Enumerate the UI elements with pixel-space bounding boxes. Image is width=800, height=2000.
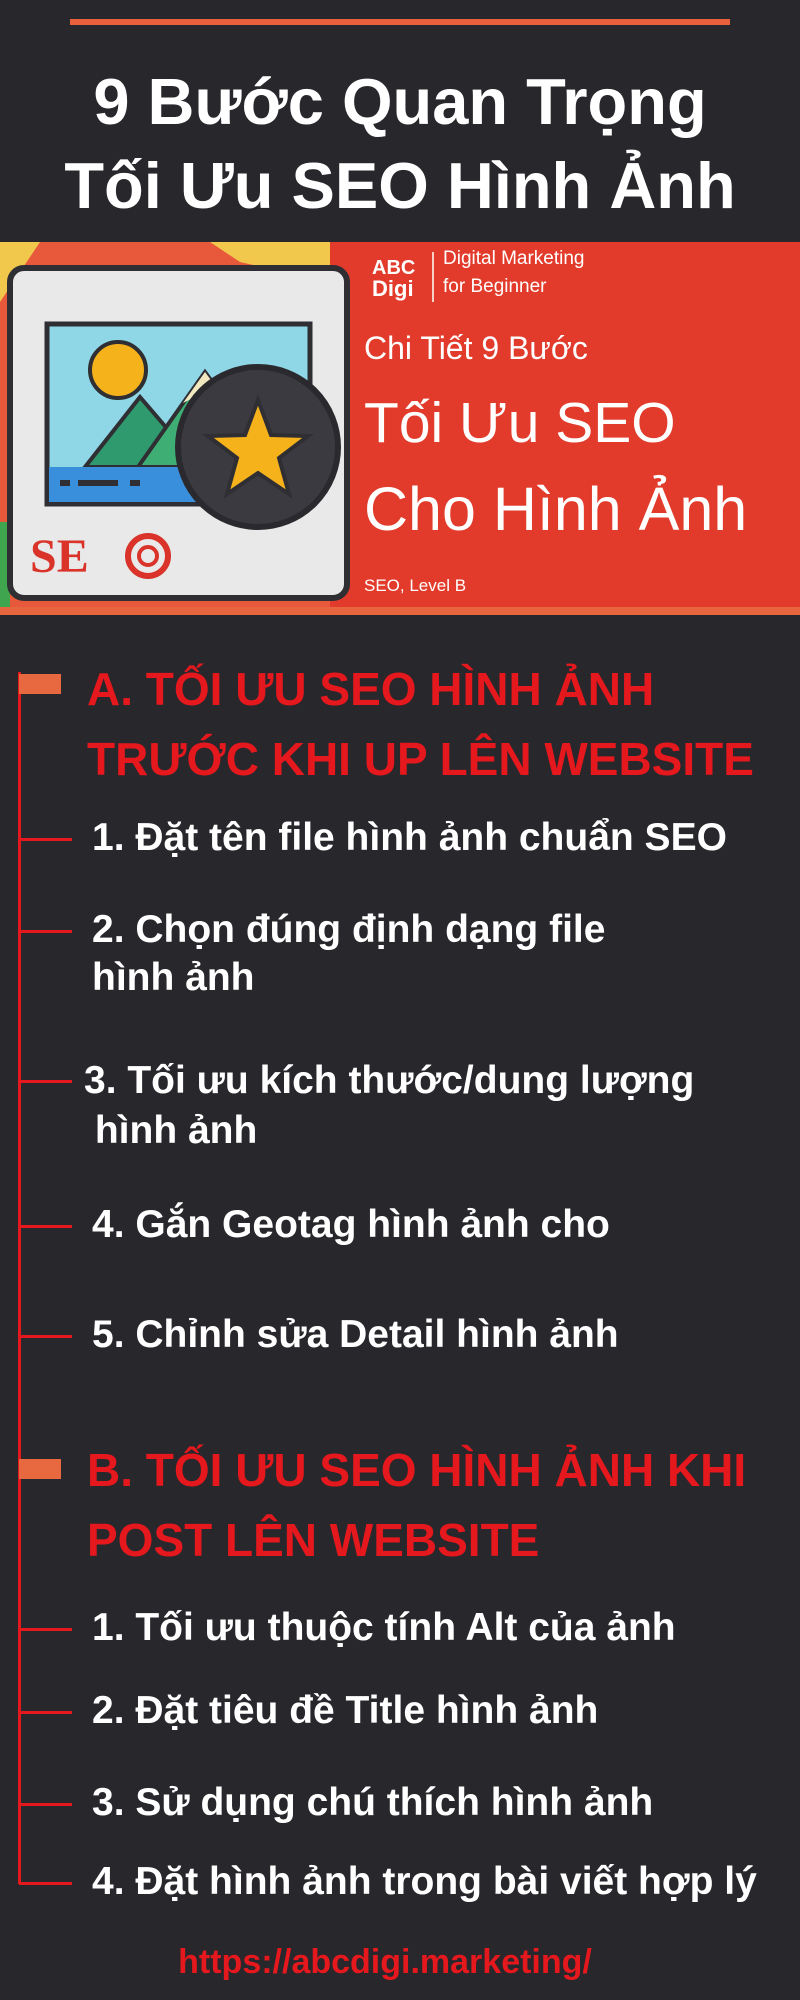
icon: image card bbox=[10, 268, 347, 598]
item A3: hình ảnh bbox=[95, 1109, 257, 1152]
banner bbox=[0, 242, 800, 615]
banner: Digital Marketing bbox=[443, 248, 584, 269]
section B marker bbox=[19, 1459, 61, 1479]
title: Tối Ưu SEO Hình Ảnh bbox=[64, 149, 736, 222]
item B4: 4. Đặt hình ảnh trong bài viết hợp lý bbox=[92, 1860, 757, 1903]
item A2: hình ảnh bbox=[92, 956, 254, 999]
timeline vertical line bbox=[18, 672, 21, 1884]
item A3 bbox=[21, 1059, 694, 1152]
logo text: ABC bbox=[372, 257, 415, 279]
top accent line bbox=[70, 19, 730, 25]
banner headline: Chi Tiết 9 Bước bbox=[364, 330, 588, 366]
section A marker bbox=[19, 674, 61, 694]
text: SEO logo: SE bbox=[30, 530, 89, 583]
item B2: 2. Đặt tiêu đề Title hình ảnh bbox=[92, 1689, 598, 1732]
item A3: 3. Tối ưu kích thước/dung lượng bbox=[84, 1059, 694, 1102]
heading B: POST LÊN WEBSITE bbox=[87, 1514, 539, 1566]
item A4: 4. Gắn Geotag hình ảnh cho bbox=[92, 1203, 610, 1246]
footer url: https://abcdigi.marketing/ bbox=[178, 1943, 592, 1981]
icon: star badge bbox=[178, 367, 338, 527]
item A1: 1. Đặt tên file hình ảnh chuẩn SEO bbox=[92, 816, 727, 859]
title bbox=[64, 65, 736, 222]
item B3: 3. Sử dụng chú thích hình ảnh bbox=[92, 1781, 653, 1824]
banner: SEO, Level B bbox=[364, 576, 466, 595]
heading A: TRƯỚC KHI UP LÊN WEBSITE bbox=[87, 733, 754, 785]
heading B bbox=[87, 1444, 746, 1566]
banner: for Beginner bbox=[443, 276, 547, 297]
item A2: 2. Chọn đúng định dạng file bbox=[92, 908, 605, 951]
heading A: A. TỐI ƯU SEO HÌNH ẢNH bbox=[87, 663, 654, 715]
banner: Digi bbox=[372, 276, 414, 301]
heading A bbox=[87, 663, 754, 785]
title: 9 Bước Quan Trọng bbox=[93, 65, 707, 138]
item B1: 1. Tối ưu thuộc tính Alt của ảnh bbox=[92, 1606, 676, 1649]
banner: Cho Hình Ảnh bbox=[364, 475, 747, 543]
item A5: 5. Chỉnh sửa Detail hình ảnh bbox=[92, 1313, 619, 1356]
banner: Tối Ưu SEO bbox=[364, 391, 676, 455]
item A2 bbox=[21, 908, 605, 999]
heading B: B. TỐI ƯU SEO HÌNH ẢNH KHI bbox=[87, 1444, 746, 1496]
